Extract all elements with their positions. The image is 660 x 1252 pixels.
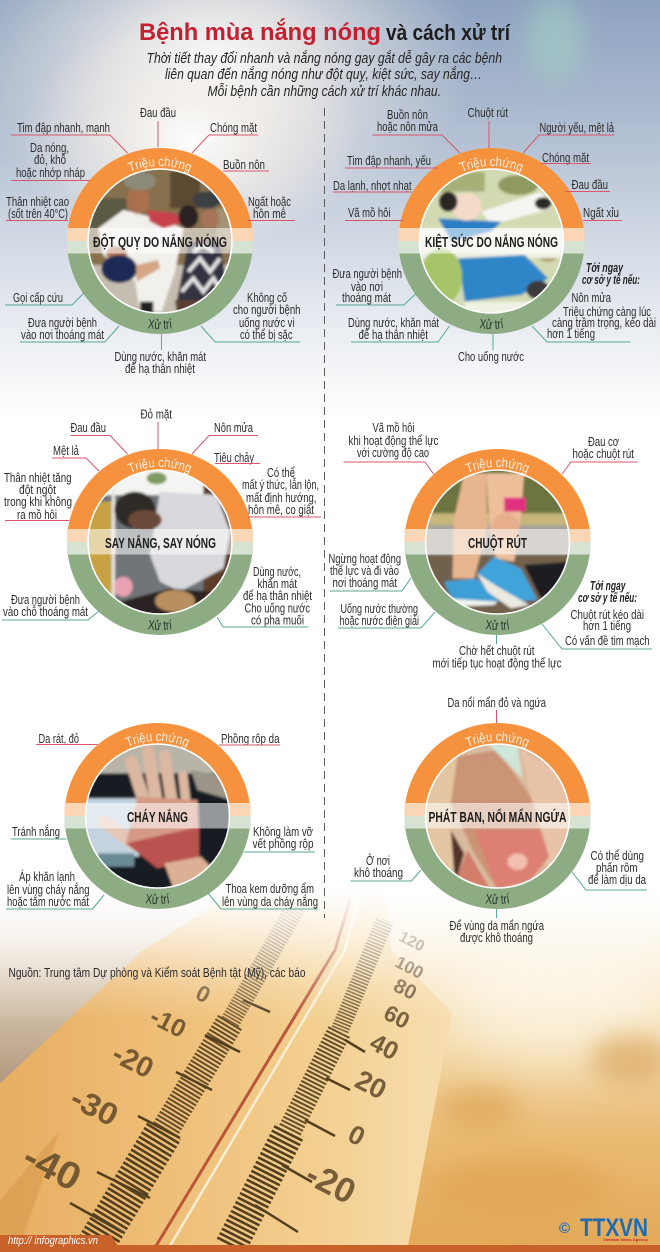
treatment label: Xử trí (485, 619, 509, 630)
symptoms label: Triệu chứng (127, 457, 192, 475)
labels: sunburn (6, 732, 318, 909)
labels: sunburn: Không làm vỡ (253, 825, 313, 839)
labels: sunstroke: Có thể (267, 466, 295, 480)
labels: heat stroke: để hạ thân nhiệt (125, 362, 195, 376)
labels: heat rash: Để vùng da mẩn ngứa (450, 919, 544, 933)
labels: muscle cramps: hơn 1 tiếng (583, 619, 631, 633)
background: thermometer photo: 60 (380, 999, 414, 1034)
source: Nguồn: Trung tâm Dự phòng và Kiểm soát Bệnh tật (Mỹ), các báo (8, 966, 306, 980)
background: thermometer photo: -20 (107, 1038, 158, 1085)
labels: heat exhaustion: Đau đầu (572, 178, 608, 192)
band title: CHUỘT RÚT (468, 534, 527, 552)
labels: heat stroke: Đưa người bệnh (28, 316, 97, 330)
treatment label: Xử trí (479, 318, 503, 330)
intro text: Mỗi bệnh cần những cách xử trí khác nhau. (208, 83, 441, 100)
labels: heat exhaustion: Vã mồ hôi (348, 206, 390, 220)
labels: heat stroke: Da nóng, (30, 141, 69, 155)
band title: CHÁY NẮNG (127, 808, 188, 826)
labels: muscle cramps: Đau cơ (588, 435, 619, 449)
treatment label: Xử trí (148, 619, 172, 630)
panel: heat rash ring (404, 723, 590, 909)
symptoms label: Triệu chứng (464, 457, 529, 475)
background: thermometer photo: 40 (365, 1028, 403, 1066)
labels: heat stroke: cho người bệnh (233, 303, 301, 317)
labels: sunstroke: Dùng nước, (253, 565, 301, 579)
labels: muscle cramps (328, 421, 652, 670)
labels: sunstroke: đột ngột (19, 483, 56, 497)
photo: boy in blue shirt lying down (420, 170, 563, 312)
labels: muscle cramps: thể lực và đi vào (330, 564, 399, 578)
panel: muscle cramps ring (404, 449, 590, 635)
labels: heat rash: Ở nơi (366, 853, 390, 868)
labels: heat exhaustion: Cho uống nước (458, 350, 524, 364)
labels: heat exhaustion: Dùng nước, khăn mát (348, 316, 439, 330)
labels: heat stroke: Ngất hoặc (248, 195, 291, 209)
symptoms label: Triệu chứng (464, 731, 529, 749)
symptoms label: Triệu chứng (124, 731, 189, 749)
labels: heat stroke: Thân nhiệt cao (6, 195, 69, 209)
labels: heat stroke: vào nơi thoáng mát (21, 328, 104, 342)
labels: sunstroke (2, 408, 321, 628)
labels: heat rash: được khô thoáng (460, 931, 533, 945)
labels: sunstroke: Đỏ mặt (140, 408, 172, 422)
divider (324, 108, 326, 918)
labels: heat exhaustion: Tới ngay (586, 261, 624, 275)
labels: sunstroke: vào chỗ thoáng mát (3, 604, 88, 619)
intro text (146, 50, 502, 100)
treatment label: Xử trí (485, 893, 509, 904)
panel: heat exhaustion ring (398, 148, 584, 334)
background: thermometer photo: 120 (396, 928, 427, 956)
background: thermometer photo: 20 (350, 1064, 392, 1105)
labels: sunburn: Tránh nắng (12, 824, 60, 839)
labels: heat exhaustion: để hạ thân nhiệt (358, 328, 428, 342)
labels: sunstroke: hôn mê, co giật (248, 503, 314, 517)
labels: heat rash: Da nổi mẩn đỏ và ngứa (448, 696, 546, 710)
labels: heat stroke: Không cố (247, 291, 287, 305)
labels: heat rash: khô thoáng (354, 866, 403, 880)
labels: heat stroke: hoặc nhớp nháp (16, 166, 85, 180)
labels: muscle cramps: nơi thoáng mát (332, 576, 397, 590)
photo: man carrying a child (88, 170, 232, 312)
labels: heat exhaustion: Ngất xỉu (583, 206, 619, 220)
labels: heat exhaustion: hoặc nôn mửa (377, 120, 438, 134)
labels: heat exhaustion: Người yếu, mệt lả (540, 121, 614, 135)
labels: muscle cramps: Ngừng hoạt động (328, 552, 401, 566)
labels: sunstroke: khăn mát (258, 577, 297, 591)
photo: rash on skin (426, 744, 569, 888)
photo: runner's legs and blue shoes (426, 470, 569, 614)
labels: sunstroke: Cho uống nước (244, 602, 310, 616)
labels: heat exhaustion: Nôn mửa (572, 291, 611, 305)
band title: KIỆT SỨC DO NẮNG NÓNG (425, 233, 558, 251)
intro text: Thời tiết thay đổi nhanh và nắng nóng gay gắt dễ gây ra các bệnh (146, 50, 502, 67)
labels: heat stroke: Tim đập nhanh, mạnh (17, 121, 110, 135)
labels: muscle cramps: với cường độ cao (357, 446, 429, 460)
labels: heat exhaustion: Chuột rút (468, 106, 508, 120)
labels: sunburn: vết phồng rộp (252, 837, 314, 851)
labels: sunburn: hoặc tắm nước mát (7, 894, 89, 909)
labels: muscle cramps: hoặc chuột rút (572, 447, 634, 461)
labels: muscle cramps: Vã mồ hôi (372, 421, 414, 435)
labels: heat stroke: Chóng mặt (210, 121, 257, 135)
band title: SAY NẮNG, SAY NÓNG (105, 534, 216, 552)
labels: muscle cramps: mới tiếp tục hoạt động thể lực (432, 656, 562, 670)
labels: sunstroke: Đưa người bệnh (11, 593, 80, 607)
labels: heat exhaustion (332, 106, 656, 364)
background: thermometer photo: -20 (299, 1154, 362, 1212)
labels: sunstroke: Đau đầu (70, 421, 106, 435)
intro text: liên quan đến nắng nóng như đột quỵ, kiệt sức, say nắng… (165, 66, 482, 83)
treatment label: Xử trí (148, 318, 172, 330)
background: thermometer photo: 0 (192, 979, 215, 1008)
title: và cách xử trí (386, 20, 511, 45)
labels: heat stroke: uống nước vì (239, 316, 295, 330)
panel: heat stroke ring (67, 148, 253, 334)
labels: sunstroke: có pha muối (251, 614, 304, 628)
panel: sunburn ring (64, 723, 250, 909)
labels: heat exhaustion: Buồn nôn (387, 108, 428, 122)
logo: TTXVN: © (559, 1220, 570, 1237)
labels: muscle cramps: hoặc nước điện giải (340, 614, 419, 628)
band title: PHÁT BAN, NỔI MẨN NGỨA (428, 808, 567, 826)
background: thermometer photo: 80 (390, 975, 420, 1005)
panel: sunstroke ring (67, 449, 253, 635)
labels: heat rash: Có thể dùng (590, 849, 644, 863)
labels: muscle cramps: Uống nước thường (340, 602, 418, 616)
labels: heat stroke: Dùng nước, khăn mát (114, 350, 206, 364)
labels: heat stroke: đỏ, khô (34, 153, 66, 167)
title (139, 18, 511, 46)
labels: sunburn: Da rát, đỏ (38, 732, 79, 746)
labels: heat exhaustion: thoáng mát (342, 291, 391, 305)
labels: heat exhaustion: Đưa người bệnh (332, 267, 402, 281)
labels: sunstroke: Thân nhiệt tăng (4, 471, 72, 485)
labels: muscle cramps: Chờ hết chuột rút (459, 644, 535, 658)
photo: man slumped over (88, 470, 232, 614)
labels: sunburn: lên vùng da cháy nắng (222, 894, 318, 909)
labels: sunstroke: Mệt lả (53, 444, 79, 458)
background: thermometer photo: 100 (392, 952, 427, 983)
logo: TTXVN (559, 1214, 649, 1242)
background: thermometer photo: -40 (16, 1135, 88, 1200)
background: thermometer photo (0, 890, 660, 1246)
band title: ĐỘT QUỴ DO NẮNG NÓNG (93, 233, 227, 251)
labels: sunstroke: Nôn mửa (214, 421, 253, 435)
logo: TTXVN: Vietnam News Agency (603, 1237, 649, 1242)
treatment label: Xử trí (145, 893, 169, 904)
labels: heat exhaustion: Da lạnh, nhợt nhạt (333, 179, 412, 193)
labels: sunburn: Áp khăn lạnh (19, 869, 75, 884)
symptoms label: Triệu chứng (127, 156, 192, 174)
labels: heat exhaustion: hơn 1 tiếng (547, 327, 595, 341)
labels: heat exhaustion: Tim đập nhanh, yếu (347, 154, 431, 168)
labels: sunburn: Thoa kem dưỡng ẩm (226, 882, 314, 896)
logo: TTXVN: TTXVN (580, 1214, 648, 1242)
title: Bệnh mùa nắng nóng (139, 18, 381, 46)
labels: muscle cramps: khi hoạt động thể lực (348, 434, 438, 448)
labels: sunstroke: Tiêu chảy (214, 451, 255, 465)
labels: heat exhaustion: vào nơi (351, 280, 383, 294)
labels: heat stroke: Buồn nôn (223, 158, 265, 172)
background: thermometer photo: -30 (65, 1080, 124, 1133)
labels: sunburn: Phồng rộp da (221, 732, 280, 746)
labels: sunburn: lên vùng cháy nắng (7, 882, 90, 897)
background: thermometer photo: -10 (145, 1002, 190, 1044)
labels: heat stroke: Đau đầu (140, 106, 176, 120)
labels: heat exhaustion: Chóng mặt (542, 151, 589, 165)
labels: heat stroke: hôn mê (253, 207, 286, 221)
labels: heat rash (350, 696, 647, 945)
labels: muscle cramps: Tới ngay (590, 579, 626, 593)
footer bar (0, 1235, 660, 1252)
symptoms label: Triệu chứng (458, 156, 523, 174)
labels: heat stroke: có thể bị sặc (240, 328, 292, 342)
background: sky (0, 0, 660, 900)
labels: sunstroke: mất ý thức, lẫn lộn, (242, 477, 319, 492)
footer bar: http:// infographics.vn (8, 1235, 98, 1247)
labels: heat stroke: (sốt trên 40°C) (8, 207, 68, 221)
background: thermometer photo: 0 (343, 1119, 370, 1152)
labels: heat rash: phấn rôm (596, 861, 638, 875)
labels: sunstroke: để hạ thân nhiệt (243, 589, 312, 603)
labels: sunstroke: ra mồ hôi (17, 508, 57, 522)
labels: sunstroke: mất định hướng, (246, 491, 316, 505)
labels: heat stroke (5, 106, 301, 376)
labels: heat stroke: Gọi cấp cứu (13, 291, 63, 305)
labels: sunstroke: trong khi không (4, 495, 72, 509)
photo: sunburned hand (86, 744, 229, 888)
